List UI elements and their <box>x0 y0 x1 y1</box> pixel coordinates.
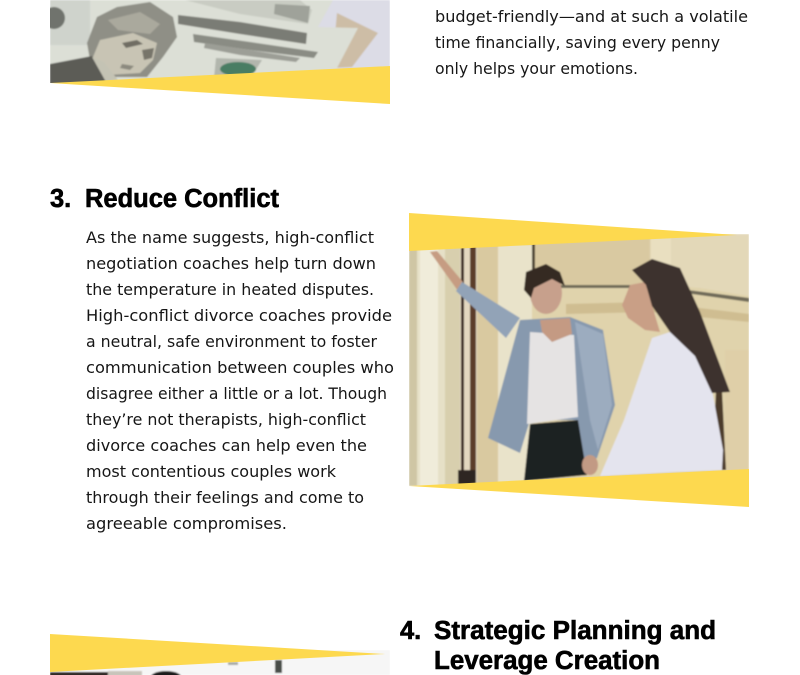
text block: reduce conflict description: a neutral, safe environment to foster <box>86 333 378 351</box>
text block: intro continuation: budget-friendly—and at such a volatile <box>435 8 748 26</box>
heading: 4. Strategic Planning and Leverage Creation: 4. <box>400 617 421 645</box>
text block: reduce conflict description: High-conflict divorce coaches provide <box>86 307 392 325</box>
text block: reduce conflict description <box>86 229 394 533</box>
text block: reduce conflict description: disagree either a little or a lot. Though <box>86 385 387 403</box>
yellow ribbon top <box>409 213 737 251</box>
yellow ribbon bottom <box>409 469 749 507</box>
panel: couple photo <box>409 213 749 507</box>
panel: next photo <box>50 634 390 675</box>
text block: reduce conflict description: agreeable compromises. <box>86 515 287 533</box>
text block: reduce conflict description: they’re not therapists, high-conflict <box>86 411 366 429</box>
text block: reduce conflict description: communication between couples who <box>86 359 394 377</box>
text block: reduce conflict description: negotiation coaches help turn down <box>86 255 376 273</box>
panel: money photo <box>43 0 390 104</box>
text block: intro continuation: only helps your emotions. <box>435 60 638 78</box>
heading: 4. Strategic Planning and Leverage Creation: Leverage Creation <box>434 647 660 675</box>
heading: 3. Reduce Conflict: Reduce Conflict <box>85 185 279 213</box>
yellow ribbon <box>50 66 390 104</box>
heading: 4. Strategic Planning and Leverage Creation: Strategic Planning and <box>434 617 716 645</box>
photo: couple arguing <box>409 234 749 486</box>
heading: 4. Strategic Planning and Leverage Creation <box>400 617 716 675</box>
text block: reduce conflict description: As the name suggests, high-conflict <box>86 229 374 247</box>
text block: intro continuation: time financially, saving every penny <box>435 34 720 52</box>
yellow ribbon <box>50 634 385 672</box>
text block: intro continuation <box>435 8 748 78</box>
photo: partly visible <box>50 650 390 675</box>
text block: reduce conflict description: most contentious couples work <box>86 463 336 481</box>
heading: 3. Reduce Conflict: 3. <box>50 185 71 213</box>
woman <box>600 331 723 476</box>
text block: reduce conflict description: divorce coaches can help even the <box>86 437 367 455</box>
text block: reduce conflict description: through their feelings and come to <box>86 489 364 507</box>
man <box>430 251 463 291</box>
text block: reduce conflict description: the temperature in heated disputes. <box>86 281 374 299</box>
photo: dollar bills <box>43 0 390 85</box>
